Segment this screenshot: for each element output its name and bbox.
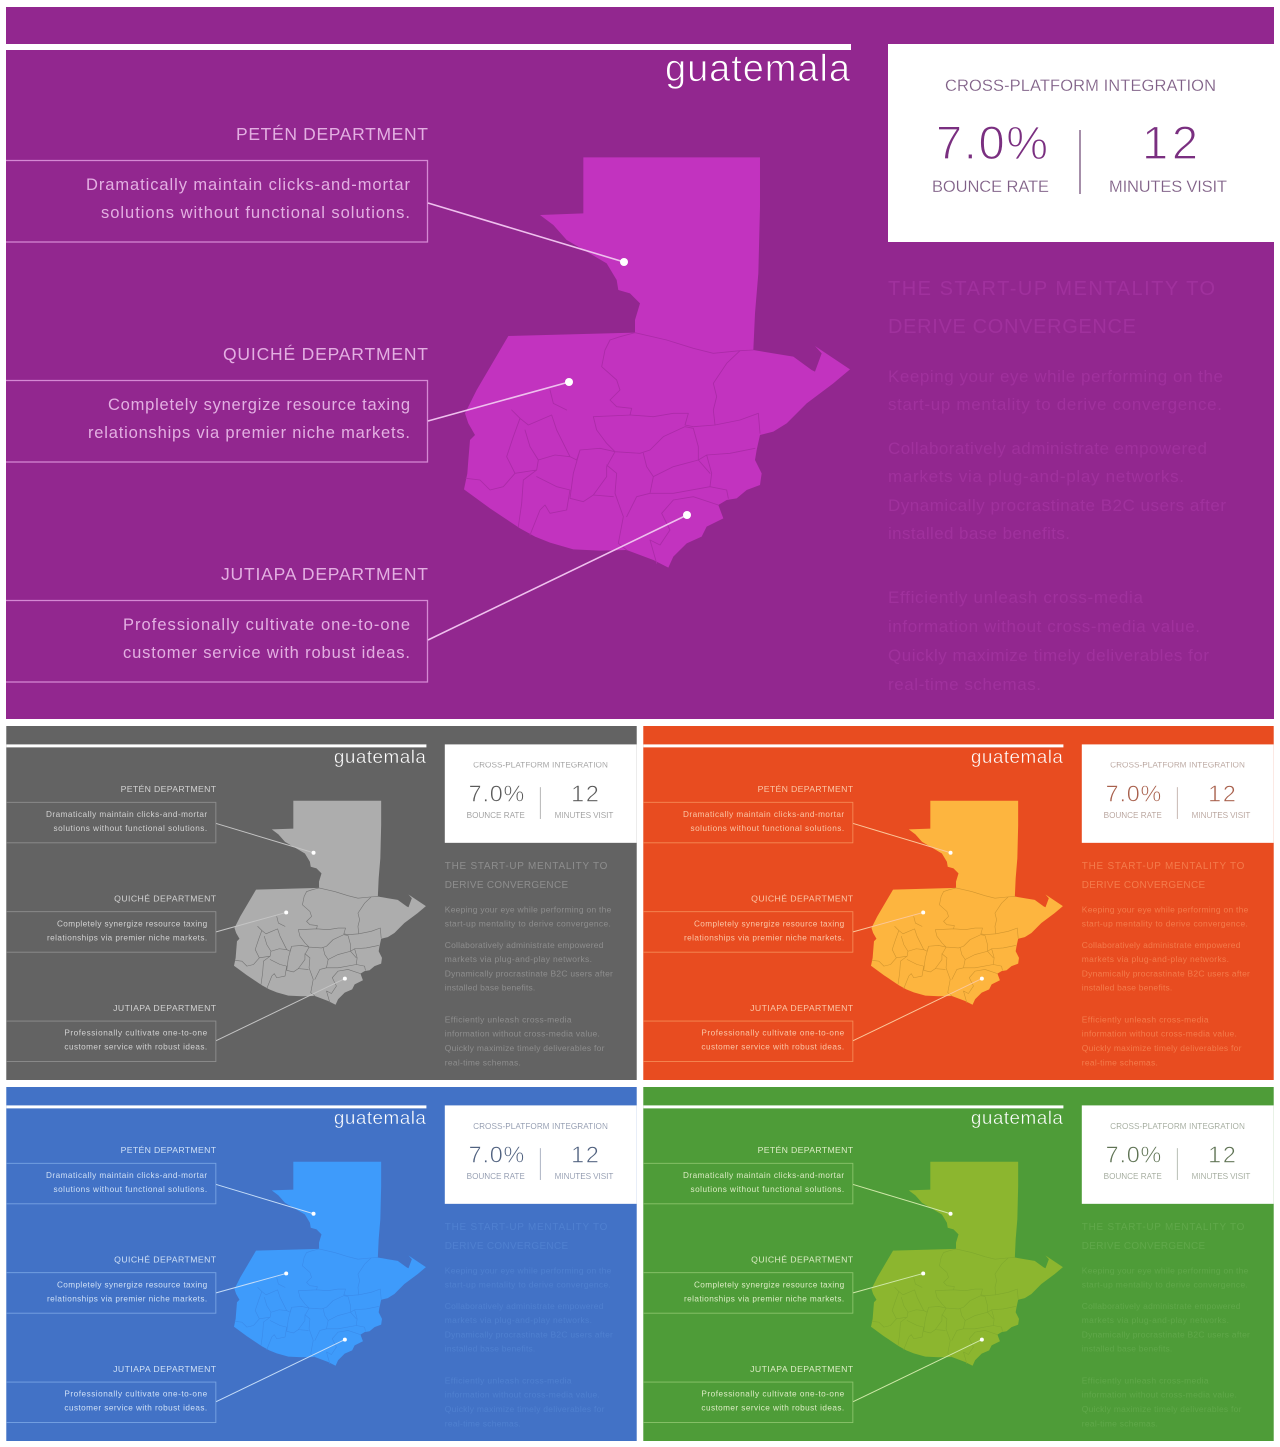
- stats card: 7.0%: [1106, 1142, 1161, 1168]
- description text: DERIVE CONVERGENCE: [445, 880, 568, 891]
- description text: Collaboratively administrate empowered: [888, 439, 1207, 458]
- stats card: 7.0%: [469, 1142, 524, 1168]
- callout: Petén: PETÉN DEPARTMENT: [236, 124, 428, 144]
- description text: DERIVE CONVERGENCE: [1082, 1241, 1205, 1252]
- stats card: MINUTES VISIT: [1109, 178, 1227, 196]
- description text: THE START-UP MENTALITY TO: [888, 278, 1215, 300]
- stats card: 7.0%: [469, 781, 524, 807]
- description text: Dynamically procrastinate B2C users after: [1082, 1330, 1250, 1340]
- stats card: 7.0%: [936, 116, 1048, 169]
- description text: markets via plug-and-play networks.: [445, 1315, 592, 1325]
- callout: Quiché: Completely synergize resource taxing: [57, 1280, 208, 1289]
- description text: information without cross-media value.: [888, 617, 1200, 636]
- panel: gray variant: [6, 726, 637, 1080]
- stats card: BOUNCE RATE: [467, 811, 525, 820]
- callout: Quiché: [6, 344, 573, 462]
- callout: Petén: [6, 1145, 316, 1216]
- description text: Efficiently unleash cross-media: [445, 1014, 572, 1024]
- callout: Quiché: Completely synergize resource taxing: [108, 396, 410, 414]
- callout: Petén: [643, 784, 953, 855]
- panel: green variant: [643, 1087, 1274, 1441]
- stats card: MINUTES VISIT: [555, 811, 613, 820]
- description text: [888, 278, 1226, 694]
- stats card: CROSS-PLATFORM INTEGRATION: [473, 761, 608, 770]
- description text: Keeping your eye while performing on the: [445, 1265, 612, 1275]
- callout: Quiché: [643, 894, 925, 952]
- stats card: MINUTES VISIT: [1192, 1172, 1250, 1181]
- map of Guatemala: [234, 801, 426, 1005]
- callout: Jutiapa: [6, 977, 347, 1062]
- stats card: BOUNCE RATE: [932, 178, 1049, 196]
- callout: Quiché: relationships via premier niche markets.: [88, 424, 410, 442]
- header rule: [6, 44, 851, 50]
- description text: DERIVE CONVERGENCE: [888, 316, 1136, 338]
- description text: Efficiently unleash cross-media: [1082, 1375, 1209, 1385]
- description text: real-time schemas.: [1082, 1058, 1158, 1068]
- callout: Jutiapa: JUTIAPA DEPARTMENT: [113, 1003, 217, 1013]
- description text: [1082, 861, 1250, 1068]
- callout: Quiché: [6, 1255, 288, 1313]
- stats card: BOUNCE RATE: [1104, 1172, 1162, 1181]
- callout: Jutiapa: JUTIAPA DEPARTMENT: [221, 564, 428, 584]
- description text: THE START-UP MENTALITY TO: [445, 1222, 608, 1233]
- description text: Dynamically procrastinate B2C users after: [445, 969, 613, 979]
- description text: start-up mentality to derive convergence.: [1082, 1279, 1248, 1289]
- header rule: [6, 744, 426, 747]
- callout: Quiché: Completely synergize resource taxing: [57, 919, 208, 928]
- stats card: [445, 1105, 637, 1204]
- stats card: CROSS-PLATFORM INTEGRATION: [473, 1122, 608, 1131]
- stats card: BOUNCE RATE: [1104, 811, 1162, 820]
- description text: real-time schemas.: [1082, 1419, 1158, 1429]
- description text: Keeping your eye while performing on the: [445, 904, 612, 914]
- description text: Quickly maximize timely deliverables for: [445, 1404, 605, 1414]
- title: guatemala: [971, 1108, 1063, 1129]
- callout: Jutiapa: Professionally cultivate one-to-one: [64, 1029, 208, 1038]
- description text: Quickly maximize timely deliverables for: [1082, 1043, 1242, 1053]
- callout: Jutiapa: [643, 977, 984, 1062]
- description text: Keeping your eye while performing on the: [888, 367, 1223, 386]
- description text: Dynamically procrastinate B2C users after: [888, 496, 1226, 515]
- description text: Dynamically procrastinate B2C users after: [1082, 969, 1250, 979]
- description text: DERIVE CONVERGENCE: [445, 1241, 568, 1252]
- callout: Petén: Dramatically maintain clicks-and-mortar: [683, 1171, 844, 1180]
- description text: Keeping your eye while performing on the: [1082, 1265, 1249, 1275]
- description text: information without cross-media value.: [445, 1029, 600, 1039]
- stats card: CROSS-PLATFORM INTEGRATION: [1110, 1122, 1245, 1131]
- description text: Efficiently unleash cross-media: [888, 588, 1144, 607]
- callout: Quiché: QUICHÉ DEPARTMENT: [114, 894, 217, 904]
- callout: Petén: solutions without functional solutions.: [54, 1185, 207, 1194]
- title: guatemala: [665, 48, 851, 90]
- callout: Jutiapa: [6, 1338, 347, 1423]
- description text: information without cross-media value.: [445, 1390, 600, 1400]
- panel: blue variant: [6, 1087, 637, 1441]
- description text: markets via plug-and-play networks.: [1082, 954, 1229, 964]
- stats card: CROSS-PLATFORM INTEGRATION: [945, 77, 1216, 95]
- callout: Jutiapa: Professionally cultivate one-to-one: [64, 1390, 208, 1399]
- callout: Quiché: QUICHÉ DEPARTMENT: [114, 1255, 217, 1265]
- callout: Petén: solutions without functional solutions.: [691, 1185, 844, 1194]
- callout: Petén: PETÉN DEPARTMENT: [758, 784, 854, 794]
- stats card: [888, 44, 1274, 242]
- header rule: [6, 1105, 426, 1108]
- map of Guatemala: [464, 157, 850, 568]
- description text: [445, 861, 613, 1068]
- callout: Jutiapa: JUTIAPA DEPARTMENT: [750, 1003, 854, 1013]
- stats card: MINUTES VISIT: [1192, 811, 1250, 820]
- callout: Quiché: Completely synergize resource taxing: [694, 919, 845, 928]
- callout: Quiché: Completely synergize resource taxing: [694, 1280, 845, 1289]
- description text: Keeping your eye while performing on the: [1082, 904, 1249, 914]
- callout: Jutiapa: [643, 1338, 984, 1423]
- description text: Collaboratively administrate empowered: [1082, 940, 1241, 950]
- stats card: 12: [1208, 1142, 1236, 1168]
- callout: Petén: Dramatically maintain clicks-and-mortar: [46, 1171, 207, 1180]
- callout: Quiché: relationships via premier niche markets.: [47, 933, 207, 942]
- callout: Petén: Dramatically maintain clicks-and-mortar: [683, 810, 844, 819]
- description text: start-up mentality to derive convergence.: [445, 1279, 611, 1289]
- stats card: 12: [571, 1142, 599, 1168]
- description text: Quickly maximize timely deliverables for: [1082, 1404, 1242, 1414]
- callout: Petén: solutions without functional solutions.: [691, 824, 844, 833]
- callout: Jutiapa: Professionally cultivate one-to-one: [701, 1029, 845, 1038]
- description text: installed base benefits.: [445, 983, 535, 993]
- callout: Petén: PETÉN DEPARTMENT: [758, 1145, 854, 1155]
- title: guatemala: [334, 1108, 426, 1129]
- callout: Quiché: [6, 894, 288, 952]
- stats card: 12: [571, 781, 599, 807]
- description text: Quickly maximize timely deliverables for: [445, 1043, 605, 1053]
- callout: Petén: [643, 1145, 953, 1216]
- description text: Collaboratively administrate empowered: [445, 1301, 604, 1311]
- description text: markets via plug-and-play networks.: [888, 467, 1184, 486]
- callout: Petén: PETÉN DEPARTMENT: [121, 784, 217, 794]
- callout: Jutiapa: [6, 511, 691, 682]
- description text: real-time schemas.: [445, 1058, 521, 1068]
- description text: [445, 1222, 613, 1429]
- description text: installed base benefits.: [445, 1344, 535, 1354]
- map of Guatemala: [871, 801, 1063, 1005]
- callout: Petén: solutions without functional solutions.: [101, 204, 410, 222]
- description text: Quickly maximize timely deliverables for: [888, 646, 1209, 665]
- callout: Quiché: [643, 1255, 925, 1313]
- stats card: [1082, 744, 1274, 843]
- description text: start-up mentality to derive convergence.: [1082, 918, 1248, 928]
- map of Guatemala: [871, 1162, 1063, 1366]
- panel: orange variant: [643, 726, 1274, 1080]
- callout: Jutiapa: customer service with robust ideas.: [123, 644, 410, 662]
- callout: Jutiapa: Professionally cultivate one-to-one: [123, 616, 410, 634]
- header rule: [643, 744, 1063, 747]
- callout: Jutiapa: customer service with robust ideas.: [64, 1404, 207, 1413]
- title: guatemala: [334, 747, 426, 768]
- stats card: MINUTES VISIT: [555, 1172, 613, 1181]
- callout: Petén: Dramatically maintain clicks-and-mortar: [86, 176, 410, 194]
- description text: markets via plug-and-play networks.: [1082, 1315, 1229, 1325]
- description text: start-up mentality to derive convergence.: [445, 918, 611, 928]
- description text: THE START-UP MENTALITY TO: [1082, 861, 1245, 872]
- description text: information without cross-media value.: [1082, 1029, 1237, 1039]
- callout: Quiché: relationships via premier niche markets.: [684, 1294, 844, 1303]
- description text: Efficiently unleash cross-media: [445, 1375, 572, 1385]
- callout: Quiché: relationships via premier niche markets.: [684, 933, 844, 942]
- description text: start-up mentality to derive convergence.: [888, 395, 1222, 414]
- description text: Efficiently unleash cross-media: [1082, 1014, 1209, 1024]
- map of Guatemala: [234, 1162, 426, 1366]
- callout: Jutiapa: customer service with robust ideas.: [701, 1404, 844, 1413]
- callout: Quiché: QUICHÉ DEPARTMENT: [751, 894, 854, 904]
- callout: Jutiapa: customer service with robust ideas.: [701, 1043, 844, 1052]
- callout: Jutiapa: JUTIAPA DEPARTMENT: [750, 1364, 854, 1374]
- callout: Petén: [6, 124, 628, 266]
- stats card: CROSS-PLATFORM INTEGRATION: [1110, 761, 1245, 770]
- description text: Collaboratively administrate empowered: [1082, 1301, 1241, 1311]
- stats card: 7.0%: [1106, 781, 1161, 807]
- stats card: BOUNCE RATE: [467, 1172, 525, 1181]
- callout: Quiché: QUICHÉ DEPARTMENT: [223, 344, 428, 364]
- callout: Quiché: QUICHÉ DEPARTMENT: [751, 1255, 854, 1265]
- description text: markets via plug-and-play networks.: [445, 954, 592, 964]
- description text: THE START-UP MENTALITY TO: [1082, 1222, 1245, 1233]
- callout: Quiché: relationships via premier niche markets.: [47, 1294, 207, 1303]
- callout: Petén: solutions without functional solutions.: [54, 824, 207, 833]
- stats card: 12: [1208, 781, 1236, 807]
- callout: Jutiapa: JUTIAPA DEPARTMENT: [113, 1364, 217, 1374]
- description text: Dynamically procrastinate B2C users after: [445, 1330, 613, 1340]
- title: guatemala: [971, 747, 1063, 768]
- description text: [1082, 1222, 1250, 1429]
- callout: Jutiapa: customer service with robust ideas.: [64, 1043, 207, 1052]
- description text: DERIVE CONVERGENCE: [1082, 880, 1205, 891]
- panel: purple main variant: [6, 7, 1274, 719]
- description text: installed base benefits.: [1082, 1344, 1172, 1354]
- description text: real-time schemas.: [445, 1419, 521, 1429]
- callout: Petén: [6, 784, 316, 855]
- description text: information without cross-media value.: [1082, 1390, 1237, 1400]
- header rule: [643, 1105, 1063, 1108]
- stats card: [1082, 1105, 1274, 1204]
- callout: Jutiapa: Professionally cultivate one-to-one: [701, 1390, 845, 1399]
- description text: Collaboratively administrate empowered: [445, 940, 604, 950]
- description text: installed base benefits.: [1082, 983, 1172, 993]
- callout: Petén: Dramatically maintain clicks-and-mortar: [46, 810, 207, 819]
- description text: THE START-UP MENTALITY TO: [445, 861, 608, 872]
- stats card: 12: [1142, 116, 1198, 169]
- stats card: [445, 744, 637, 843]
- description text: real-time schemas.: [888, 675, 1041, 694]
- description text: installed base benefits.: [888, 524, 1070, 543]
- callout: Petén: PETÉN DEPARTMENT: [121, 1145, 217, 1155]
